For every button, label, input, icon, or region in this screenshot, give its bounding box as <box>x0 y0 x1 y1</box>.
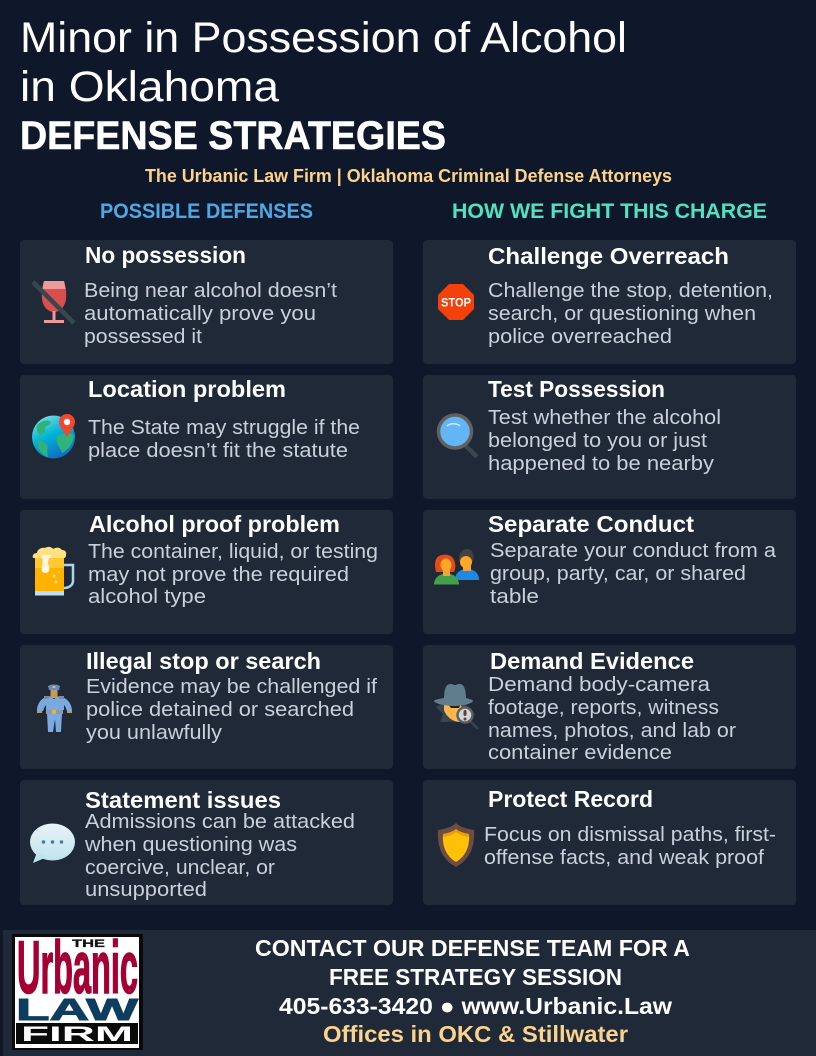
title: in Oklahoma <box>20 63 279 111</box>
panel: separate conduct: Separate your conduct from a <box>490 540 777 562</box>
panel: demand evidence: names, photos, and lab or <box>488 720 736 742</box>
icon: stop sign <box>438 284 474 320</box>
contact text: 405-633-3420 ● www.Urbanic.Law <box>279 993 672 1019</box>
panel: alcohol proof problem: The container, liquid, or testing <box>88 541 378 563</box>
icon: two people <box>434 549 479 584</box>
panel: no possession: possessed it <box>84 326 202 348</box>
icon: police officer <box>37 684 72 732</box>
panel: statement issues: Statement issues <box>85 787 281 813</box>
panel: illegal stop or search: police detained or searched <box>86 699 354 721</box>
panel: demand evidence: container evidence <box>488 742 672 764</box>
panel: alcohol proof problem: Alcohol proof problem <box>89 511 340 537</box>
panel: statement issues: coercive, unclear, or <box>85 857 275 879</box>
icon: crossed-out wine glass <box>33 281 74 323</box>
logo: The Urbanic Law Firm: Urbanic <box>17 925 138 1009</box>
icon: beer mug <box>33 547 73 596</box>
panel: alcohol proof problem: may not prove the required <box>88 564 349 586</box>
panel: location problem: Location problem <box>88 376 286 402</box>
panel: protect record <box>423 780 796 905</box>
panel: illegal stop or search <box>20 645 393 769</box>
panel: challenge overreach: Challenge Overreach <box>488 243 729 269</box>
panel: statement issues <box>20 780 393 905</box>
panel: demand evidence: footage, reports, witness <box>488 697 719 719</box>
heading: possible defenses: POSSIBLE DEFENSES <box>100 200 313 223</box>
panel: statement issues: unsupported <box>85 879 207 901</box>
heading: how we fight this charge: HOW WE FIGHT THIS CHARGE <box>452 200 767 223</box>
panel: test possession: happened to be nearby <box>488 453 714 475</box>
panel: demand evidence: Demand Evidence <box>490 648 694 674</box>
footer band <box>3 925 816 1056</box>
panel: separate conduct: table <box>490 586 539 608</box>
panel: illegal stop or search: you unlawfully <box>86 722 222 744</box>
subtitle: The Urbanic Law Firm | Oklahoma Criminal Defense Attorneys <box>145 166 672 186</box>
logo: The Urbanic Law Firm: LAW <box>16 993 139 1027</box>
contact text: FREE STRATEGY SESSION <box>329 964 622 990</box>
panel: no possession: automatically prove you <box>84 303 316 325</box>
panel: demand evidence: Demand body-camera <box>488 674 711 696</box>
panel: illegal stop or search: Evidence may be challenged if <box>86 676 377 698</box>
logo: The Urbanic Law Firm: FIRM <box>21 1023 133 1046</box>
panel: location problem <box>20 375 393 499</box>
title <box>20 14 627 158</box>
panel: location problem: The State may struggle if the <box>88 417 360 439</box>
panel: location problem: place doesn’t fit the statute <box>88 440 348 462</box>
panel: separate conduct: Separate Conduct <box>488 511 694 537</box>
title: DEFENSE STRATEGIES <box>20 114 446 158</box>
logo: The Urbanic Law Firm <box>12 925 143 1050</box>
panel: no possession: No possession <box>85 242 246 268</box>
icon: speech bubble <box>30 824 75 863</box>
contact text: Offices in OKC & Stillwater <box>323 1021 628 1047</box>
panel: protect record: Protect Record <box>488 786 653 812</box>
panel: no possession <box>20 240 393 364</box>
icon: globe with map pin <box>32 414 75 458</box>
panel: challenge overreach: search, or questioning when <box>488 303 756 325</box>
contact text: CONTACT OUR DEFENSE TEAM FOR A <box>255 935 690 961</box>
panel: alcohol proof problem <box>20 510 393 634</box>
icon: stop sign: STOP <box>441 296 471 310</box>
panel: protect record: offense facts, and weak proof <box>484 847 764 869</box>
panel: test possession: Test whether the alcohol <box>488 407 721 429</box>
icon: shield <box>438 823 474 867</box>
panel: no possession: Being near alcohol doesn’t <box>84 280 337 302</box>
panel: demand evidence <box>423 645 796 769</box>
panel: challenge overreach: police overreached <box>488 326 672 348</box>
contact text <box>255 935 690 1047</box>
panel: test possession <box>423 375 796 499</box>
panel: test possession: Test Possession <box>488 376 665 402</box>
panel: challenge overreach: Challenge the stop, detention, <box>488 280 773 302</box>
panel: statement issues: when questioning was <box>84 834 297 856</box>
panel: test possession: belonged to you or just <box>488 430 707 452</box>
panel: protect record: Focus on dismissal paths, first- <box>484 824 776 846</box>
panel: illegal stop or search: Illegal stop or search <box>86 648 321 674</box>
title: Minor in Possession of Alcohol <box>20 14 627 62</box>
panel: separate conduct <box>423 510 796 634</box>
icon: detective with magnifier <box>434 684 478 729</box>
panel: alcohol proof problem: alcohol type <box>88 586 206 608</box>
icon: magnifying glass <box>438 415 477 457</box>
panel: separate conduct: group, party, car, or shared <box>490 563 746 585</box>
panel: statement issues: Admissions can be attacked <box>85 811 355 833</box>
panel: challenge overreach <box>423 240 796 364</box>
logo: The Urbanic Law Firm: THE <box>72 938 105 950</box>
